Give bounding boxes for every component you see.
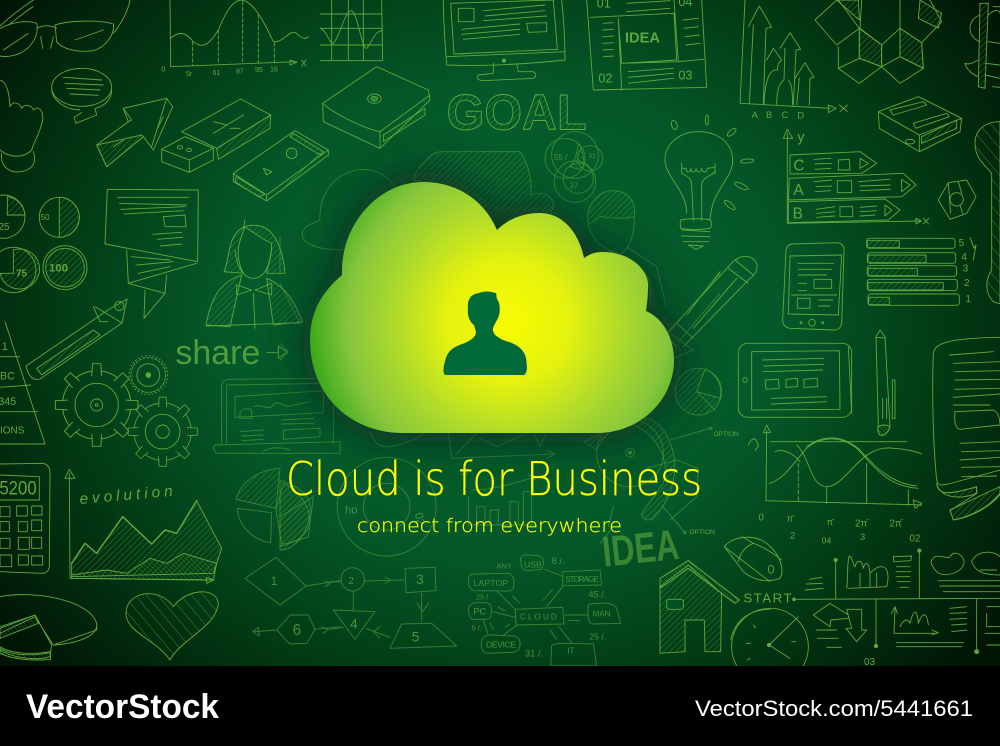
chart: sine waves: 04 bbox=[822, 535, 831, 545]
chart: growth arrows: A bbox=[752, 110, 759, 120]
icon: router box bbox=[323, 67, 430, 148]
icon: pyramid chart: BC bbox=[0, 370, 15, 382]
chart: C A B arrow bars: y bbox=[797, 129, 804, 145]
chart: faded chart under cloud bbox=[448, 430, 555, 525]
icon: pen bbox=[876, 330, 895, 435]
doodles: bottom right bbox=[660, 330, 1000, 685]
doodles: bottom left bbox=[0, 322, 340, 660]
icon: laptop bbox=[214, 378, 340, 453]
chart: timeline dashboard: START bbox=[743, 591, 792, 606]
panel: IDEA 01 02 03 04 board bbox=[587, 0, 707, 90]
pie badges: 25 50 75 100: 50 bbox=[41, 213, 50, 222]
diagram: cloud network: 31 /. bbox=[525, 649, 543, 659]
chart: faded chart under cloud: 14 bbox=[460, 468, 468, 477]
icon: calculator: 5200 bbox=[0, 479, 37, 500]
diagram: cloud network: STORAGE bbox=[565, 575, 599, 584]
text art: GOAL: GOAL bbox=[447, 84, 587, 140]
text art: IDEA: IDEA bbox=[600, 521, 681, 577]
pie badges: 25 50 75 100: 75 bbox=[16, 269, 28, 280]
chart: C A B arrow bars: C bbox=[793, 158, 804, 175]
flowchart: diamond 1 and hexagon 6: 1 bbox=[271, 574, 278, 588]
text: share with arrow: share bbox=[175, 334, 260, 372]
diagram: cloud network: 25 /. bbox=[476, 592, 490, 601]
icon: computer monitor bbox=[443, 0, 565, 81]
icon: pencil large bbox=[660, 256, 757, 347]
chart: growth arrows bbox=[740, 0, 847, 121]
icon: wrench bbox=[975, 122, 1000, 304]
chart: C A B arrow bars: A bbox=[793, 182, 804, 199]
icon: pyramid chart bbox=[0, 322, 45, 444]
panel: IDEA 01 02 03 04 board: 03 bbox=[678, 68, 692, 82]
icon: disc with gauge labels bbox=[280, 433, 436, 556]
chart: gear disc with options bbox=[584, 417, 712, 543]
icon: smartphone bbox=[233, 131, 328, 201]
chart: sine waves: 2π̄ bbox=[855, 519, 869, 530]
chart: sine waves: π̄ bbox=[827, 517, 835, 527]
chart: line curve: 61 bbox=[213, 70, 221, 77]
icon: mobile phone bbox=[783, 243, 844, 330]
icon: hex nut bbox=[938, 180, 976, 219]
subtitle: connect from everywhere bbox=[357, 515, 622, 537]
diagram: cloud network: 45 /. bbox=[588, 589, 606, 599]
chart: evolution mountains bbox=[65, 469, 222, 583]
chart: horizontal progress bars: 5 bbox=[959, 238, 965, 249]
icon: gears bbox=[55, 356, 197, 466]
icon: clock bbox=[731, 608, 808, 685]
chart: sine waves: 0 bbox=[758, 513, 764, 524]
chart: growth arrows: C bbox=[782, 110, 789, 120]
pie badges: 25 50 75 100: 100 bbox=[49, 263, 68, 275]
chart: exploded pie bbox=[236, 468, 310, 544]
flowchart: numbered steps: 2 bbox=[348, 576, 354, 587]
chart: growth arrows: D bbox=[797, 111, 804, 121]
panel: IDEA 01 02 03 04 board: 02 bbox=[598, 72, 612, 86]
diagram: cloud network: DEVICE bbox=[486, 639, 516, 649]
icon: computer mouse bbox=[724, 537, 782, 582]
diagram: cloud network: 8 /. bbox=[552, 556, 565, 566]
footer bar bbox=[0, 666, 1000, 746]
icon: calculator bbox=[0, 463, 50, 573]
icon: hatched cloud top bbox=[413, 152, 553, 230]
icon: venn diagram bbox=[545, 138, 603, 193]
doodles: top left bbox=[0, 0, 328, 379]
icon: glasses bbox=[0, 0, 130, 57]
flowchart: numbered steps: 5 bbox=[412, 629, 420, 645]
chart: horizontal progress bars: 1 bbox=[965, 294, 971, 305]
icon: person behind cloud right: 37 bbox=[569, 181, 579, 190]
icon: dollar sign bbox=[965, 3, 1000, 88]
icon: ribbon banner bbox=[105, 189, 198, 318]
chart: horizontal progress bars: 3 bbox=[963, 264, 969, 275]
doodles: flowcharts bottom centre bbox=[330, 521, 681, 666]
diagram: cloud network: 5 /. bbox=[472, 624, 482, 633]
icon: document speech bubble bbox=[933, 337, 1000, 520]
icon: hand bbox=[0, 80, 43, 172]
chart: line curve: 0 bbox=[161, 66, 165, 73]
chart: sine waves: 02 bbox=[909, 534, 921, 545]
chart: timeline dashboard bbox=[743, 549, 1000, 668]
flowchart: diamond 1 and hexagon 6 bbox=[245, 557, 340, 644]
flowchart: numbered steps: 3 bbox=[416, 571, 424, 587]
icon: pyramid chart: 1 bbox=[2, 341, 8, 353]
diagram: cloud network: CLOUD bbox=[520, 612, 557, 621]
icon: device box bbox=[878, 97, 962, 152]
icon: person behind cloud right bbox=[552, 132, 666, 307]
chart: oscillation grid bbox=[320, 0, 383, 61]
chart: C A B arrow bars bbox=[783, 129, 929, 224]
doodles: faint shapes behind cloud bbox=[280, 132, 720, 556]
chart: C A B arrow bars: B bbox=[793, 205, 803, 222]
chart: sine waves: 2 bbox=[790, 530, 795, 540]
icon: pyramid chart: IONS bbox=[0, 425, 25, 436]
icon: venn diagram: 55 / bbox=[554, 153, 568, 162]
flowchart: numbered steps: 4 bbox=[350, 615, 358, 631]
chart: line curve: 16 bbox=[270, 66, 278, 73]
icon: tablet bbox=[738, 343, 852, 417]
chart: timeline dashboard: 03 bbox=[864, 657, 876, 668]
panel: IDEA 01 02 03 04 board: IDEA bbox=[625, 31, 660, 47]
icon: disc with gauge labels: ho bbox=[345, 504, 358, 516]
icon: businesswoman bbox=[206, 220, 303, 328]
icon: disc with gauge labels: 02 bbox=[412, 512, 426, 526]
icon: house bbox=[660, 561, 739, 653]
icon: 3D arrow bbox=[97, 98, 173, 167]
chart: horizontal progress bars: 4 bbox=[961, 252, 967, 263]
doodles: top middle bbox=[320, 0, 707, 193]
icon: isometric cubes bbox=[815, 0, 942, 83]
chart: line curve: 95 bbox=[255, 67, 263, 74]
chart: evolution mountains: evolution bbox=[79, 483, 173, 508]
icon: pie fragment bbox=[280, 237, 720, 360]
diagram: cloud network: MAN bbox=[593, 610, 611, 619]
chart: sine waves: OPTION bbox=[713, 431, 739, 438]
cloud bbox=[310, 182, 674, 433]
chart: sine waves bbox=[689, 425, 922, 545]
chart: sine waves: π̄ bbox=[787, 514, 795, 524]
diagram: cloud network: IT bbox=[567, 646, 575, 655]
chart: line curve: 87 bbox=[236, 68, 244, 75]
chart: small pie bbox=[675, 368, 722, 415]
chart: growth arrows: B bbox=[766, 110, 772, 120]
title: Cloud is for Business bbox=[286, 452, 702, 506]
icon: person silhouette bbox=[443, 292, 527, 375]
icon: venn diagram: 31 bbox=[588, 152, 596, 159]
icon: heart bbox=[126, 592, 218, 660]
watermark url: VectorStock.com/5441661 bbox=[695, 696, 973, 721]
doodles: top right bbox=[660, 0, 1000, 347]
chart: sine waves: OPTION bbox=[689, 529, 715, 536]
pie badges: 25 50 75 100 bbox=[0, 195, 87, 293]
watermark logo: VectorStock bbox=[26, 688, 219, 726]
chart: horizontal progress bars bbox=[867, 237, 976, 305]
diagram: cloud network: PC bbox=[473, 606, 487, 616]
icon: USB stick bbox=[162, 99, 271, 172]
diagram: cloud network: USB bbox=[524, 559, 542, 569]
icon: light bulb bbox=[665, 115, 754, 249]
flowchart: diamond 1 and hexagon 6: 6 bbox=[293, 622, 301, 639]
chart: sine waves: 2π̄ bbox=[889, 519, 904, 530]
diagram: cloud network: 25 /. bbox=[589, 631, 606, 641]
chart: sine waves: 3 bbox=[860, 532, 865, 542]
icon: 3D pie slice bbox=[0, 595, 97, 660]
icon: outline cloud left bbox=[280, 153, 397, 250]
chart: line curve bbox=[161, 0, 308, 78]
diagram: cloud network: LAPTOP bbox=[473, 578, 509, 588]
chart: horizontal progress bars: 2 bbox=[964, 278, 970, 289]
diagram: cloud network: ANY. bbox=[497, 561, 513, 570]
chart: line curve: 5r bbox=[186, 71, 193, 78]
diagram: cloud network bbox=[468, 555, 621, 666]
icon: pencil bbox=[26, 299, 127, 379]
flowchart: numbered steps bbox=[330, 567, 457, 648]
cloud shadow bbox=[302, 170, 684, 442]
icon: speech bubble bbox=[52, 68, 112, 123]
